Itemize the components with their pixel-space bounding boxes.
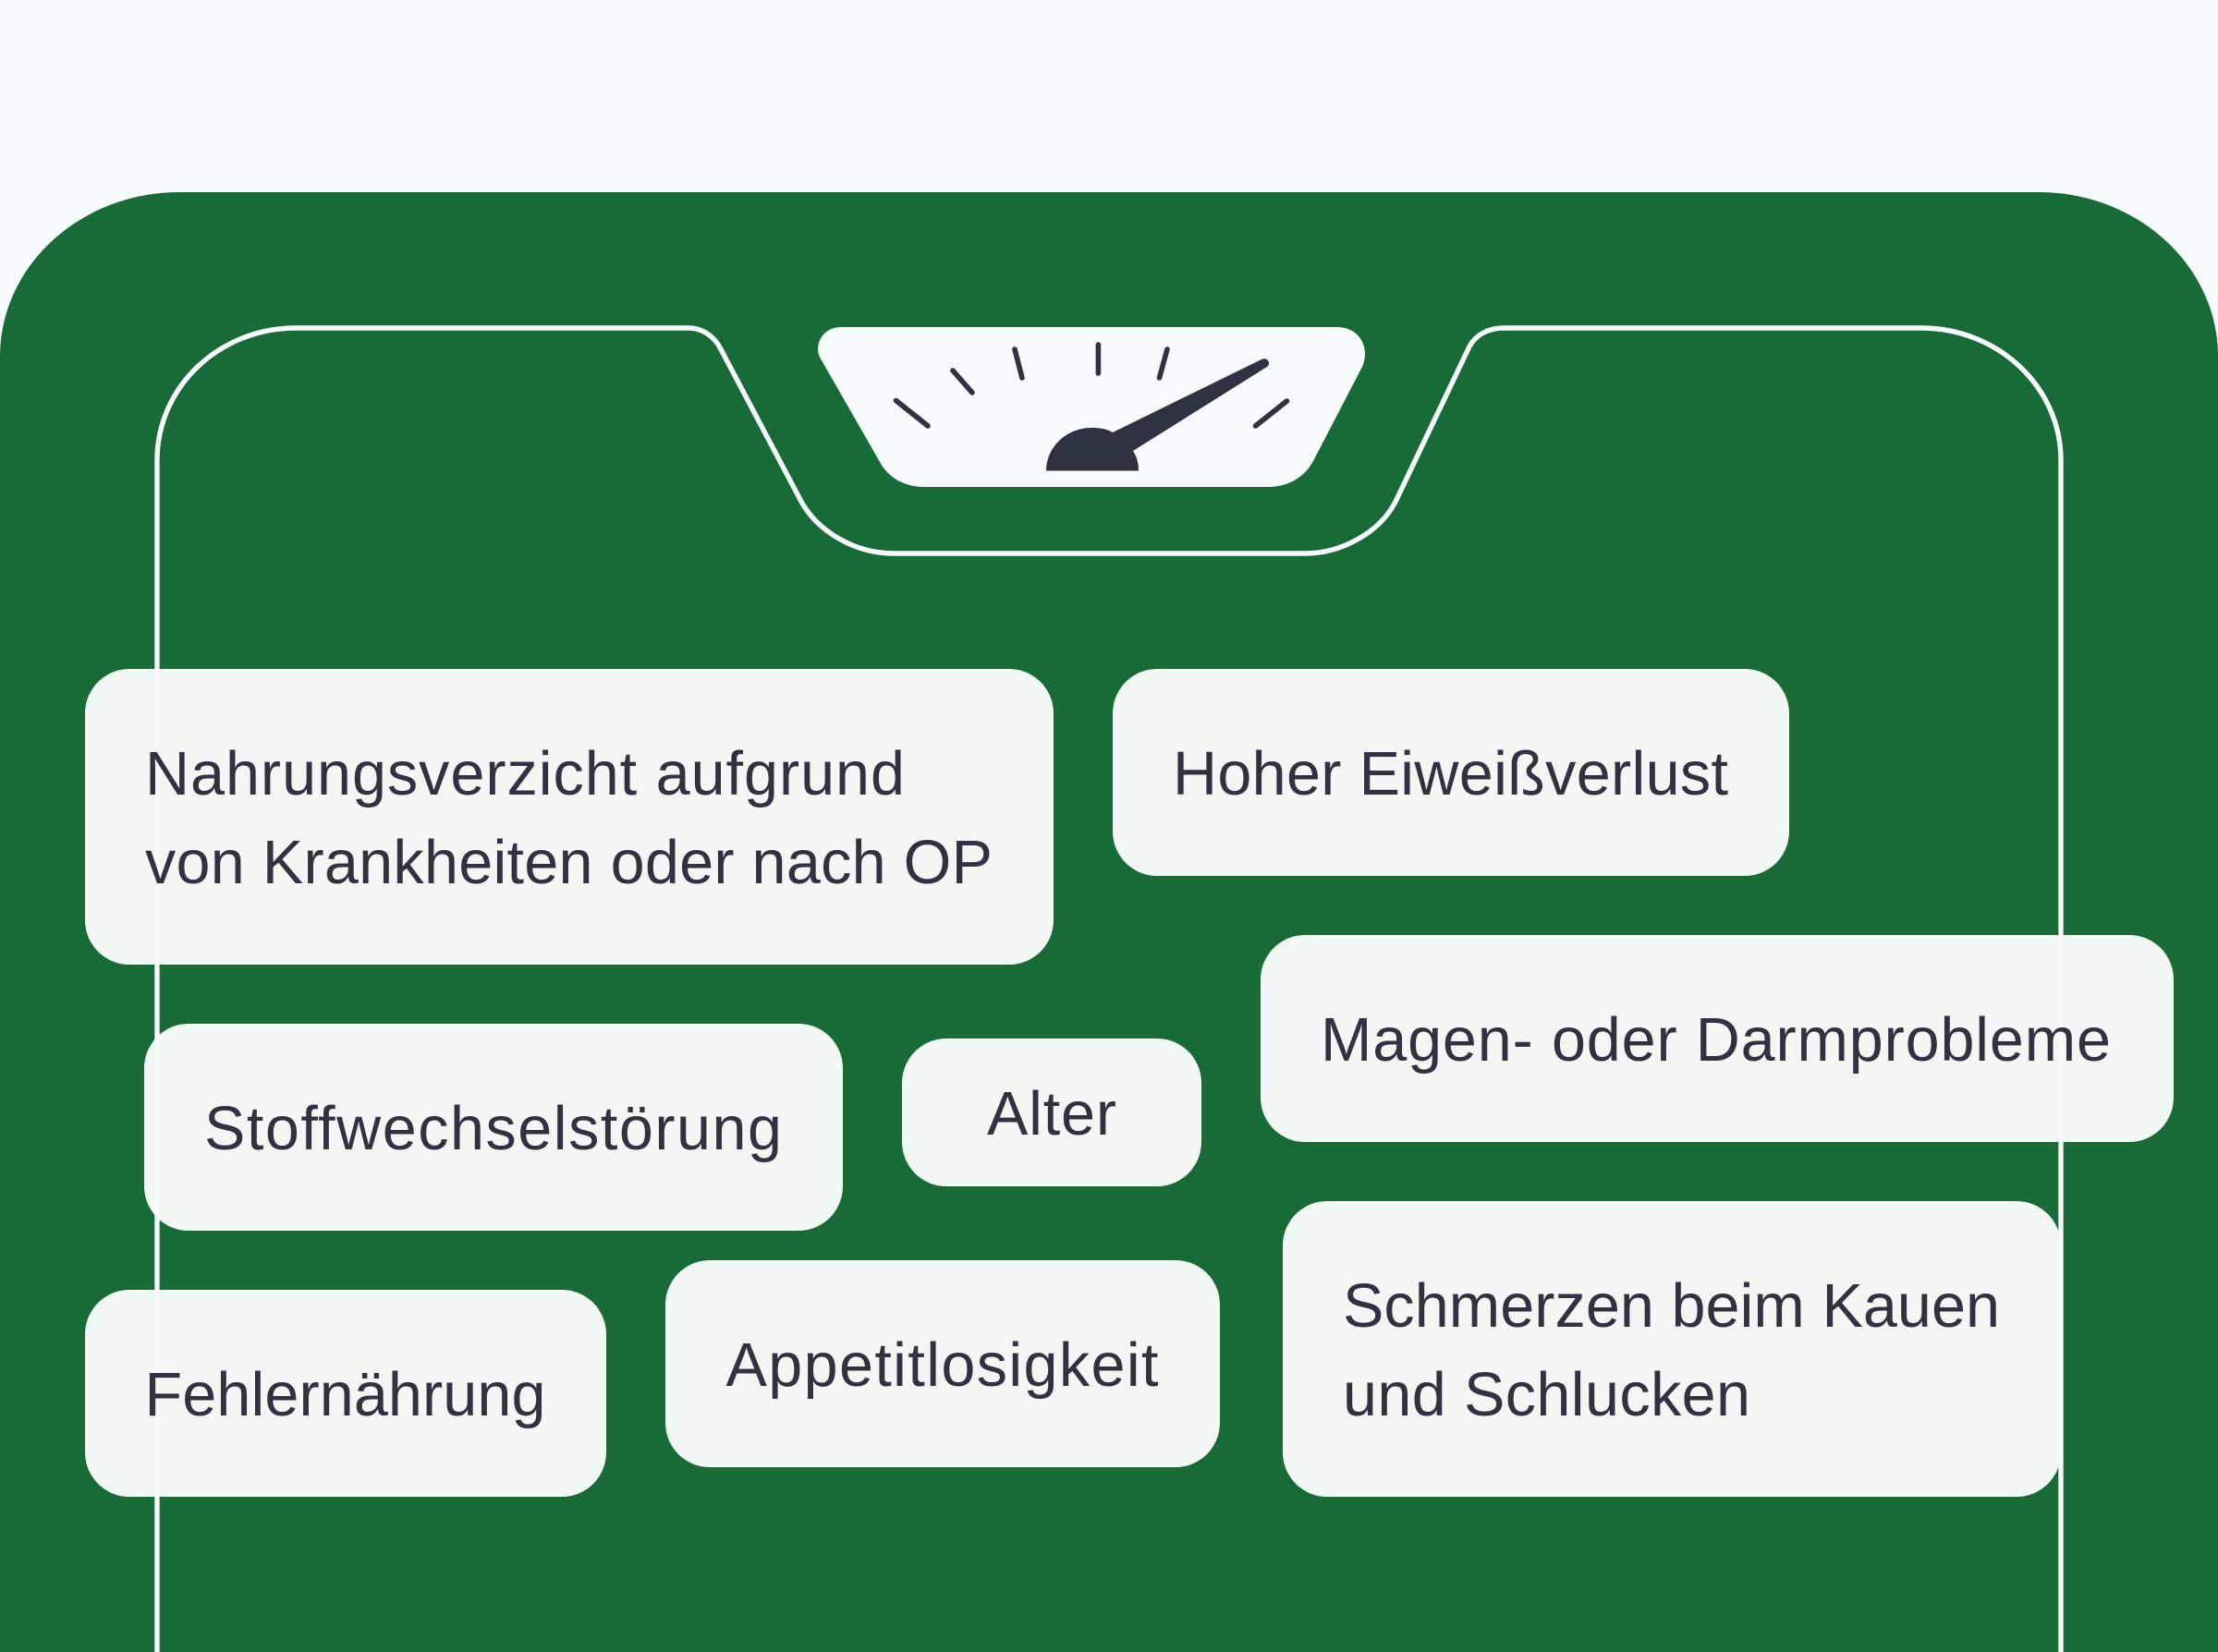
- cause: Nahrungsverzicht: Nahrungsverzicht aufgrund: [145, 740, 905, 808]
- scale plate outline: [157, 328, 2061, 1652]
- cause: Alter: Alter: [987, 1080, 1116, 1148]
- gauge needle: [1046, 358, 1269, 471]
- cause: Appetitlosigkeit: [665, 1260, 1220, 1467]
- cause: Fehlernährung: Fehlernährung: [144, 1361, 545, 1429]
- cause: Alter: [902, 1039, 1201, 1186]
- cause: Magen- oder Darmprobleme: Magen- oder Darmprobleme: [1321, 1006, 2111, 1075]
- cause: Schmerzen beim Kauen und Schlucken: [1283, 1201, 2061, 1497]
- gauge: scale display: [818, 327, 1365, 487]
- cause: Nahrungsverzicht: [85, 669, 1054, 965]
- cause: Hoher Eiweißverlust: [1113, 669, 1789, 876]
- cause: Schmerzen beim Kauen und Schlucken: und Schlucken: [1343, 1361, 1750, 1429]
- gauge dial: [818, 327, 1365, 487]
- cause: Fehlernährung: [85, 1290, 606, 1497]
- cause: Stoffwechselstörung: Stoffwechselstörung: [204, 1095, 782, 1163]
- cause: Magen- oder Darmprobleme: [1261, 935, 2174, 1142]
- cause: Schmerzen beim Kauen und Schlucken: Schmerzen beim Kauen: [1343, 1272, 2000, 1341]
- cause: Nahrungsverzicht: von Krankheiten oder nach OP: [145, 829, 993, 897]
- cause: Appetitlosigkeit: Appetitlosigkeit: [726, 1331, 1159, 1400]
- cause: Stoffwechselstörung: [144, 1024, 843, 1231]
- gauge tick marks: [896, 345, 1286, 426]
- cause: Hoher Eiweißverlust: Hoher Eiweißverlust: [1173, 740, 1728, 808]
